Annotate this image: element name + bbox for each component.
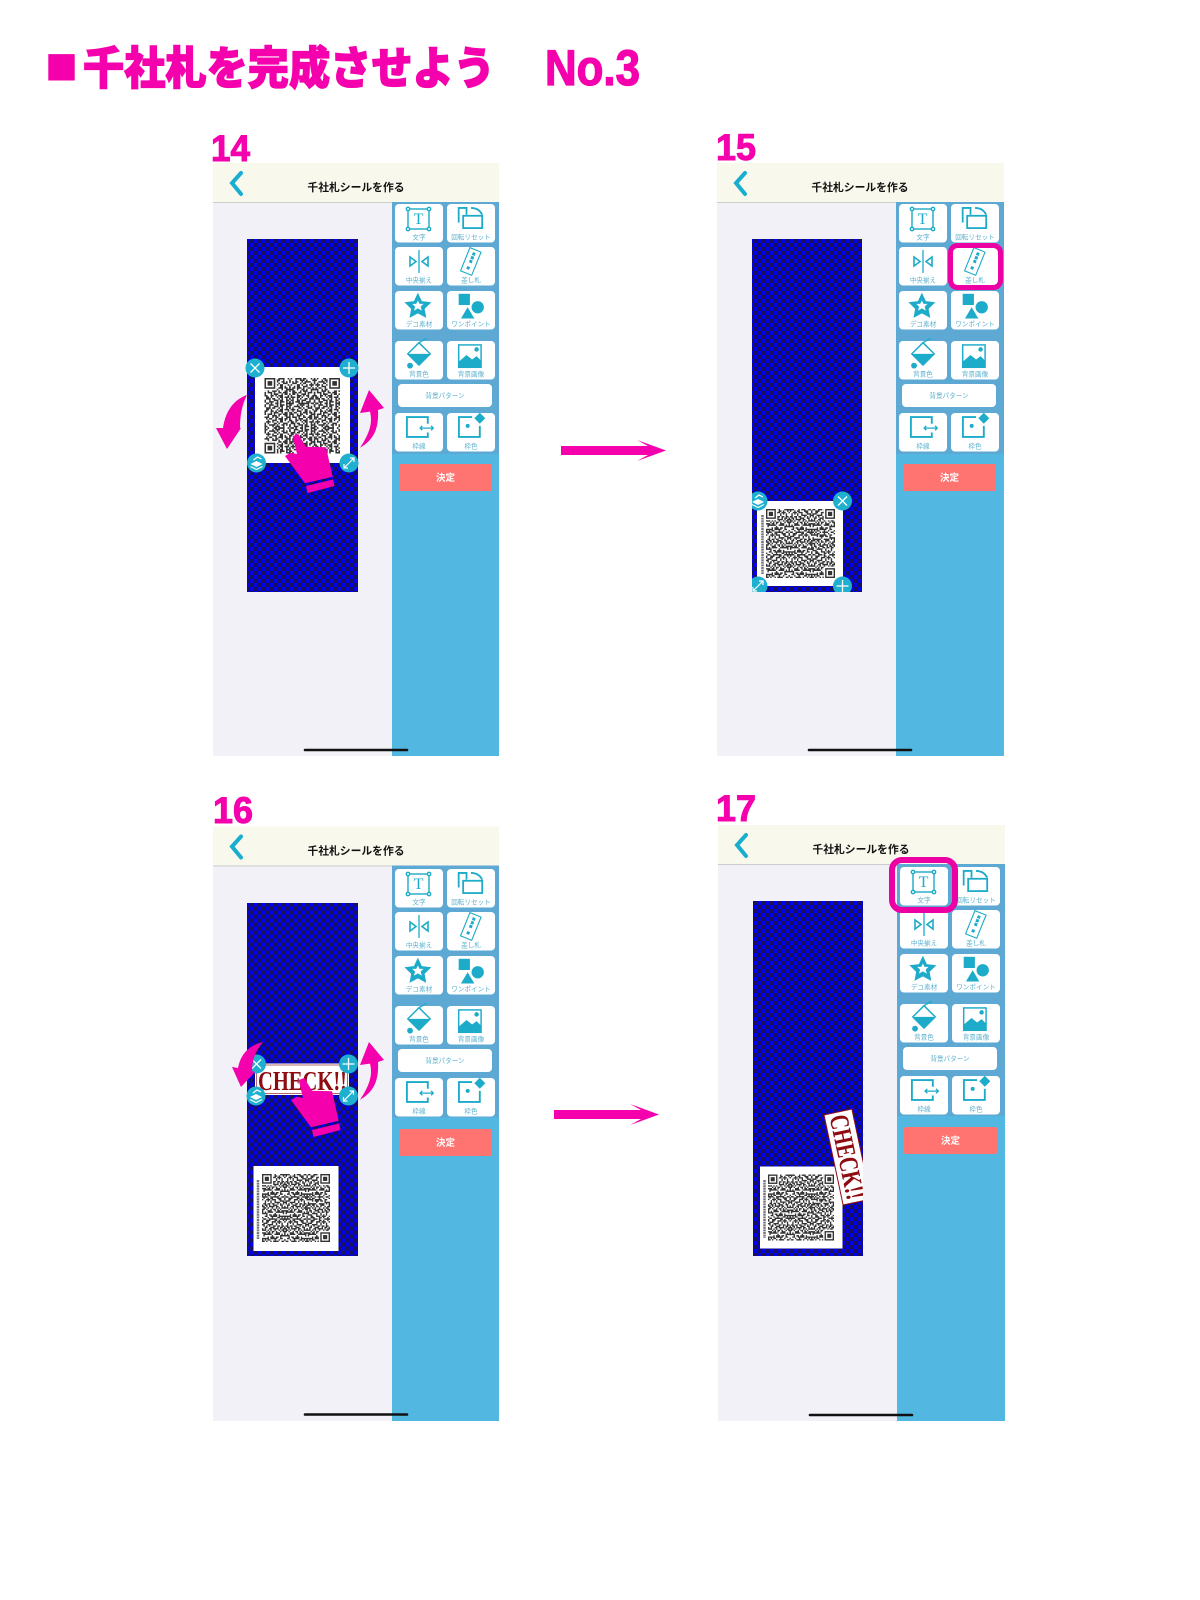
phone screen: step 16: デコ素材: [406, 984, 433, 994]
phone screen: step 15: 中央揃え: [910, 274, 936, 284]
phone screen: step 17: 差し札: [966, 938, 986, 948]
phone screen: step 17: [718, 825, 1005, 1421]
step number 17: 17: [716, 788, 756, 829]
phone screen: step 14: 背景画像: [458, 368, 485, 378]
phone screen: step 16: ワンポイント: [451, 984, 491, 994]
phone screen: step 15: [717, 163, 1004, 756]
rotate arrow left: [232, 1042, 263, 1087]
phone screen: step 16: 枠色: [464, 1106, 478, 1116]
phone screen: step 15: 枠色: [968, 440, 982, 450]
phone screen: step 15: 千社札シールを作る: [811, 179, 909, 195]
phone screen: step 16: 回転リセット: [451, 896, 491, 906]
phone screen: step 16: 文字: [412, 896, 426, 906]
title: 千社札を完成させよう: [83, 32, 495, 97]
rotated CHECK!! sticker: [824, 1108, 863, 1206]
rotate arrow left: [216, 395, 247, 449]
phone screen: step 17: 千社札シールを作る: [812, 841, 910, 857]
CHECK!! sticker with handles: CHECK!!: [258, 1066, 347, 1096]
phone screen: step 14: デコ素材: [406, 318, 433, 328]
phone screen: step 16: 中央揃え: [406, 940, 432, 950]
phone screen: step 16: 決定: [436, 1135, 455, 1149]
hand pointer: [285, 434, 334, 493]
rotated CHECK!! sticker: CHECK!!: [824, 1112, 871, 1202]
rotate arrow right: [360, 1042, 384, 1100]
QR code sticker moved to bottom with handles: [748, 492, 852, 596]
phone screen: step 14: 差し札: [461, 274, 481, 284]
phone screen: step 17: 回転リセット: [956, 894, 996, 904]
phone screen: step 14: 文字: [412, 232, 426, 242]
phone screen: step 14: 枠色: [464, 440, 478, 450]
phone screen: step 14: 決定: [436, 470, 455, 484]
step number 15: 15: [716, 127, 756, 168]
phone screen: step 15: 文字: [916, 232, 930, 242]
phone screen: step 16: 背景パターン: [425, 1055, 465, 1065]
phone screen: step 15: 差し札: [965, 274, 985, 284]
highlight: 文字 button: [892, 860, 955, 910]
phone screen: step 14: 背景パターン: [425, 390, 465, 400]
phone screen: step 16: [213, 826, 499, 1421]
step number 16: 16: [213, 790, 253, 831]
phone screen: step 17: 背景パターン: [930, 1053, 970, 1063]
phone screen: step 14: 回転リセット: [451, 232, 491, 242]
phone screen: step 14: 中央揃え: [406, 274, 432, 284]
rotate arrow right: [360, 390, 384, 448]
phone screen: step 15: 背景画像: [962, 368, 989, 378]
phone screen: step 15: ワンポイント: [955, 318, 995, 328]
QR code sticker: [760, 1164, 842, 1248]
phone screen: step 15: 回転リセット: [955, 232, 995, 242]
step number 14: 14: [211, 128, 250, 169]
phone screen: step 14: 背景色: [409, 368, 429, 378]
phone screen: step 16: 背景色: [409, 1034, 429, 1044]
phone screen: step 17: ワンポイント: [956, 982, 996, 992]
title: No.3: [545, 40, 640, 96]
phone screen: step 17: 枠線: [917, 1104, 931, 1114]
hand pointer: [291, 1078, 340, 1137]
phone screen: step 15: 枠線: [916, 440, 930, 450]
phone screen: step 15: 決定: [940, 470, 959, 484]
title: ■: [45, 42, 78, 90]
phone screen: step 14: [213, 163, 499, 756]
phone screen: step 17: 背景色: [914, 1032, 934, 1042]
phone screen: step 17: 枠色: [969, 1104, 983, 1114]
arrow: step 16 to 17: [554, 1104, 659, 1125]
phone screen: step 14: ワンポイント: [451, 318, 491, 328]
phone screen: step 17: 背景画像: [963, 1032, 990, 1042]
phone screen: step 15: 背景パターン: [929, 390, 969, 400]
phone screen: step 16: 千社札シールを作る: [307, 842, 405, 858]
phone screen: step 17: デコ素材: [911, 982, 938, 992]
phone screen: step 17: 文字: [917, 894, 931, 904]
arrow: step 14 to 15: [561, 440, 666, 461]
QR code sticker: [254, 1163, 338, 1251]
phone screen: step 17: 中央揃え: [911, 938, 937, 948]
phone screen: step 16: 枠線: [412, 1106, 426, 1116]
phone screen: step 15: デコ素材: [910, 318, 937, 328]
highlight: 差し札 button: [950, 246, 1000, 288]
phone screen: step 16: 背景画像: [458, 1034, 485, 1044]
phone screen: step 15: 背景色: [913, 368, 933, 378]
phone screen: step 14: 千社札シールを作る: [307, 179, 405, 195]
CHECK!! sticker with handles: [246, 1054, 358, 1106]
phone screen: step 16: 差し札: [461, 940, 481, 950]
phone screen: step 14: 枠線: [412, 440, 426, 450]
phone screen: step 17: 決定: [941, 1133, 960, 1147]
QR code sticker with handles: [246, 358, 358, 472]
